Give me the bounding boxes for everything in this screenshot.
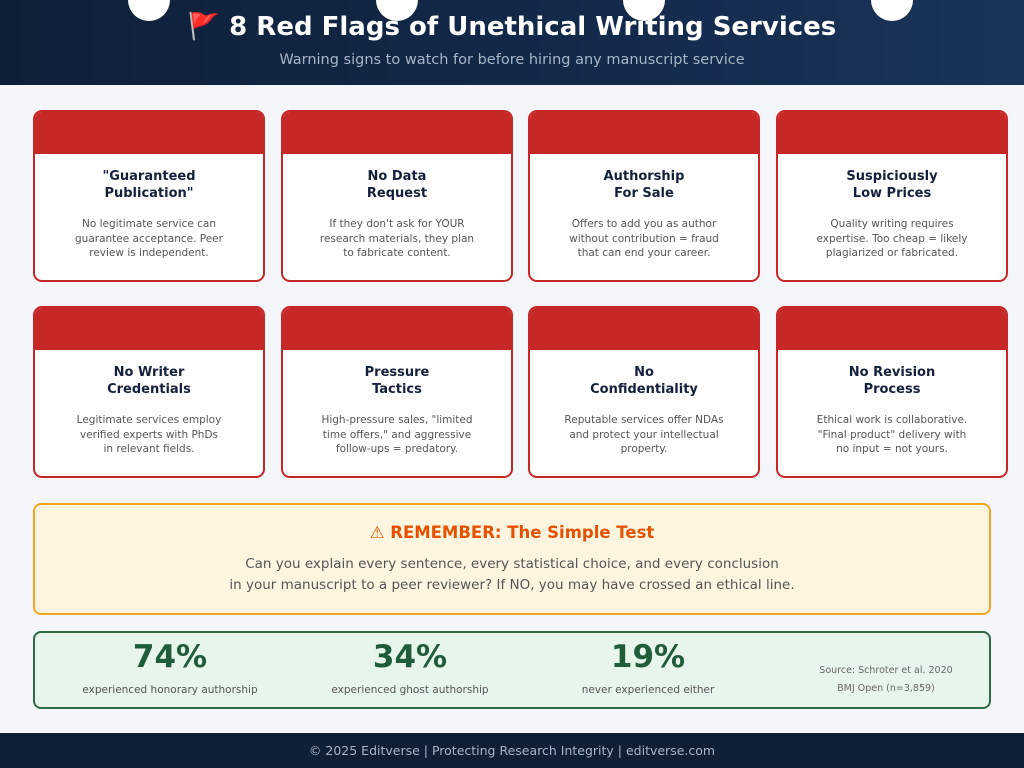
- card: guaranteed publication: Publication": [104, 186, 194, 201]
- card: no data request: No Data: [368, 169, 426, 184]
- stat: 74%: 74%: [133, 639, 207, 675]
- source: BMJ Open (n=3,859): [837, 683, 935, 694]
- card: no revision process: no input = not yours.: [836, 443, 948, 455]
- card: pressure tactics: follow-ups = predatory.: [336, 443, 458, 455]
- card: no confidentiality: and protect your intellectual: [569, 428, 719, 440]
- card: no writer credentials: No Writer: [114, 365, 184, 380]
- card: authorship for sale: [528, 110, 760, 282]
- callout: remember: [33, 503, 991, 615]
- source: Source: Schroter et al. 2020: [819, 665, 953, 676]
- card: no writer credentials: in relevant fields.: [103, 443, 195, 455]
- card: no confidentiality: Confidentiality: [590, 382, 698, 397]
- callout text: Can you explain every sentence, every statistical choice, and every conclusion: [245, 556, 779, 572]
- card: no revision process: "Final product" delivery with: [818, 428, 966, 440]
- card: no revision process: No Revision: [849, 365, 935, 380]
- card: low prices: plagiarized or fabricated.: [826, 247, 958, 259]
- card: pressure tactics: Pressure: [365, 365, 429, 380]
- card: no data request: Request: [367, 186, 427, 201]
- card: guaranteed publication: No legitimate service can: [82, 218, 216, 230]
- card: guaranteed publication: [33, 110, 265, 282]
- card: authorship for sale: Offers to add you as author: [572, 218, 716, 230]
- card: no data request: [281, 110, 513, 282]
- card: low prices: Low Prices: [853, 186, 931, 201]
- card: guaranteed publication: "Guaranteed: [102, 169, 196, 184]
- card: authorship for sale: that can end your career.: [578, 247, 710, 259]
- source: [819, 665, 953, 694]
- card: no data request: If they don't ask for YOUR: [329, 218, 465, 230]
- callout text: [229, 556, 795, 593]
- stat: 34%: 34%: [373, 639, 447, 675]
- card: authorship for sale: For Sale: [614, 186, 674, 201]
- card: no revision process: [776, 306, 1008, 478]
- card: authorship for sale: without contribution = fraud: [569, 232, 719, 244]
- card: no writer credentials: Legitimate services employ: [77, 414, 221, 426]
- card: guaranteed publication: review is independent.: [89, 247, 209, 259]
- stats panel: [33, 631, 991, 709]
- stat: 74%: [82, 639, 258, 696]
- card: low prices: Quality writing requires: [830, 218, 954, 230]
- card: no confidentiality: property.: [621, 443, 667, 455]
- stat: 74%: experienced honorary authorship: [82, 684, 258, 696]
- callout title: ⚠ REMEMBER: The Simple Test: [370, 523, 654, 542]
- header: [0, 0, 1024, 85]
- card: no writer credentials: Credentials: [107, 382, 191, 397]
- card: no confidentiality: No: [634, 365, 654, 380]
- card: guaranteed publication: guarantee acceptance. Peer: [75, 232, 223, 244]
- card: pressure tactics: High-pressure sales, "limited: [321, 414, 473, 426]
- footer: [0, 733, 1024, 768]
- subtitle: Warning signs to watch for before hiring any manuscript service: [279, 52, 745, 68]
- stat: 34%: experienced ghost authorship: [331, 684, 489, 696]
- card: no revision process: Process: [864, 382, 920, 397]
- card: no writer credentials: [33, 306, 265, 478]
- card: pressure tactics: time offers," and aggressive: [323, 428, 471, 440]
- card: no writer credentials: verified experts with PhDs: [80, 428, 218, 440]
- card: authorship for sale: Authorship: [604, 169, 684, 184]
- stat: 19%: never experienced either: [582, 684, 714, 696]
- card: low prices: Suspiciously: [846, 169, 938, 184]
- card: low prices: expertise. Too cheap = likely: [816, 232, 967, 244]
- card: low prices: [776, 110, 1008, 282]
- stat: 34%: [331, 639, 489, 696]
- card: no data request: to fabricate content.: [343, 247, 451, 259]
- card: pressure tactics: Tactics: [372, 382, 422, 397]
- card: pressure tactics: [281, 306, 513, 478]
- stat: 19%: 19%: [611, 639, 685, 675]
- card: no confidentiality: Reputable services offer NDAs: [564, 414, 724, 426]
- callout text: in your manuscript to a peer reviewer? If NO, you may have crossed an ethical line.: [229, 577, 795, 593]
- footer: © 2025 Editverse | Protecting Research Integrity | editverse.com: [309, 743, 715, 758]
- card: no data request: research materials, they plan: [320, 232, 474, 244]
- title: 🚩 8 Red Flags of Unethical Writing Services: [188, 12, 836, 42]
- card: no revision process: Ethical work is collaborative.: [817, 414, 967, 426]
- stat: 19%: [582, 639, 714, 696]
- card: no confidentiality: [528, 306, 760, 478]
